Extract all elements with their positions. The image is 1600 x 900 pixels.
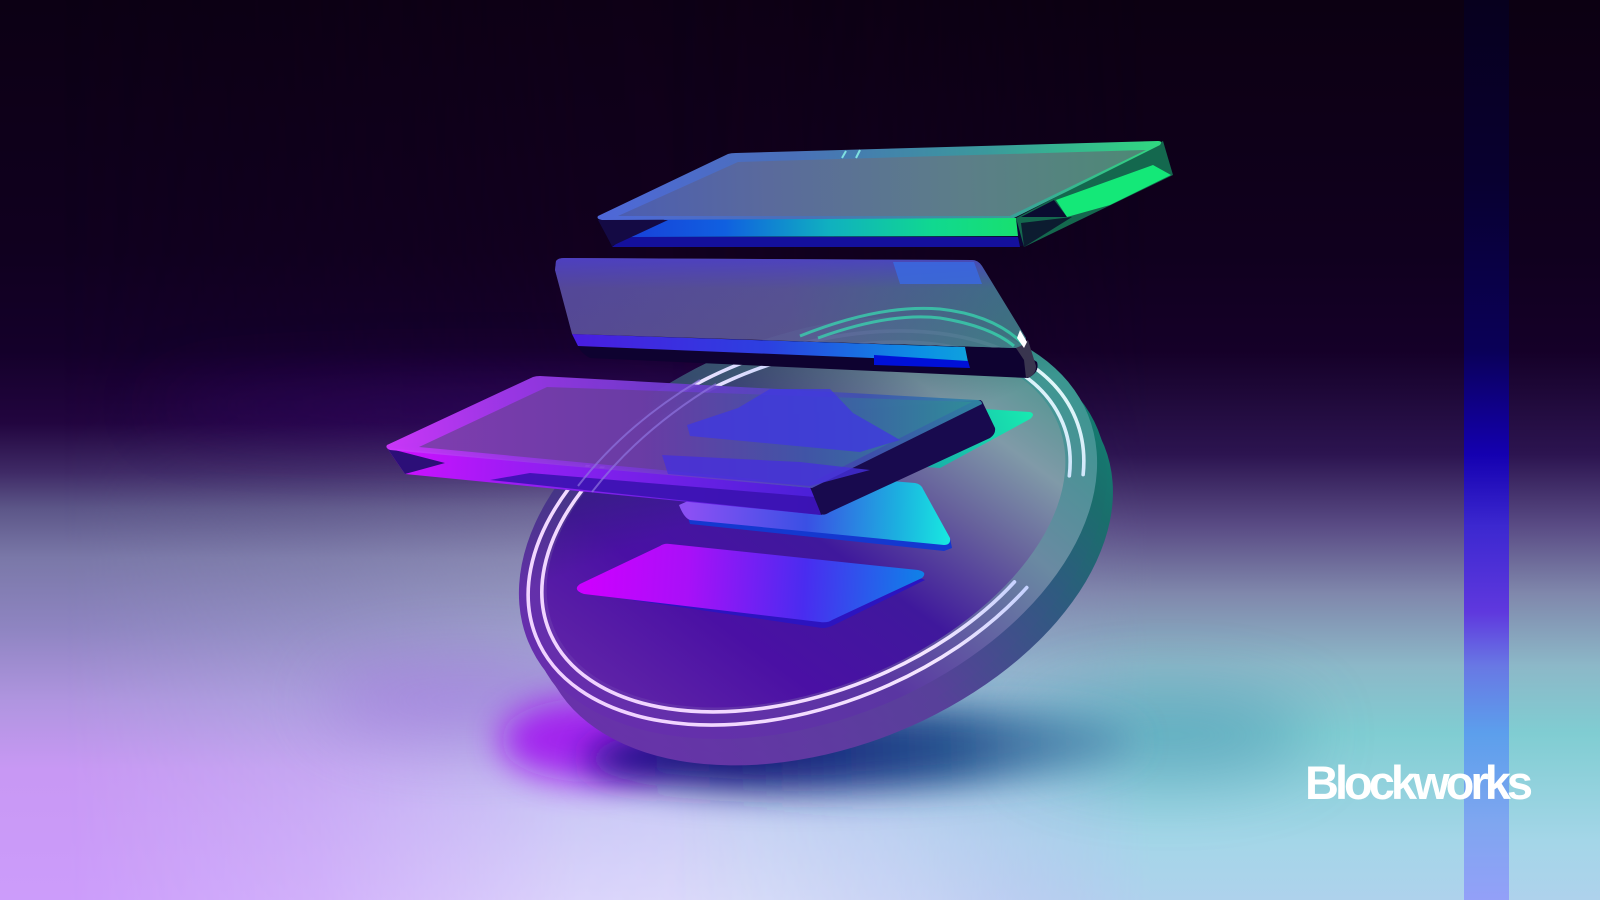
glass slab: middle	[555, 258, 1038, 378]
coin: dimmed top shading	[456, 237, 1160, 819]
bright highlight at corner	[1017, 330, 1027, 348]
vertical blue gradient stripe	[1464, 0, 1509, 900]
coin: thick disc edge	[467, 254, 1175, 845]
ring glints on upper slab	[842, 150, 860, 158]
teal rings through glass	[800, 308, 1024, 346]
blue refraction block	[893, 262, 982, 284]
refracted bars seen through glass	[687, 389, 900, 452]
lower slab underside and right side	[387, 400, 995, 515]
refracted rings through glass	[578, 380, 716, 492]
middle slab front edge dark	[572, 334, 1038, 378]
upper slab front colour band	[625, 218, 1018, 237]
glass slab: upper	[598, 141, 1173, 247]
coin: raised rim	[456, 237, 1160, 819]
background: dark studio wall fading to pastel floor	[0, 225, 1600, 900]
coin: double light rings	[470, 255, 1142, 801]
upper slab right side	[1016, 141, 1173, 247]
logo: Blockworks wordmark: Blockworks	[1305, 756, 1533, 809]
lower slab dark shadow band	[490, 473, 821, 515]
coin: inner face	[493, 274, 1119, 778]
middle slab colored edge	[572, 334, 968, 362]
lower slab top glass	[386, 376, 982, 488]
coin shadow on floor	[320, 660, 1310, 800]
coin logo: middle bar	[679, 470, 952, 551]
glass slab: lower	[386, 376, 995, 515]
upper slab dark under edge	[598, 141, 1173, 247]
coin logo: top bar	[690, 395, 1033, 468]
middle slab top glass	[555, 258, 1026, 348]
upper slab top glass	[598, 141, 1161, 220]
lower slab front edge	[387, 448, 821, 515]
coin logo: bottom bar	[577, 544, 925, 628]
middle slab side bevel	[1016, 340, 1036, 378]
lower slab right face	[810, 401, 995, 515]
